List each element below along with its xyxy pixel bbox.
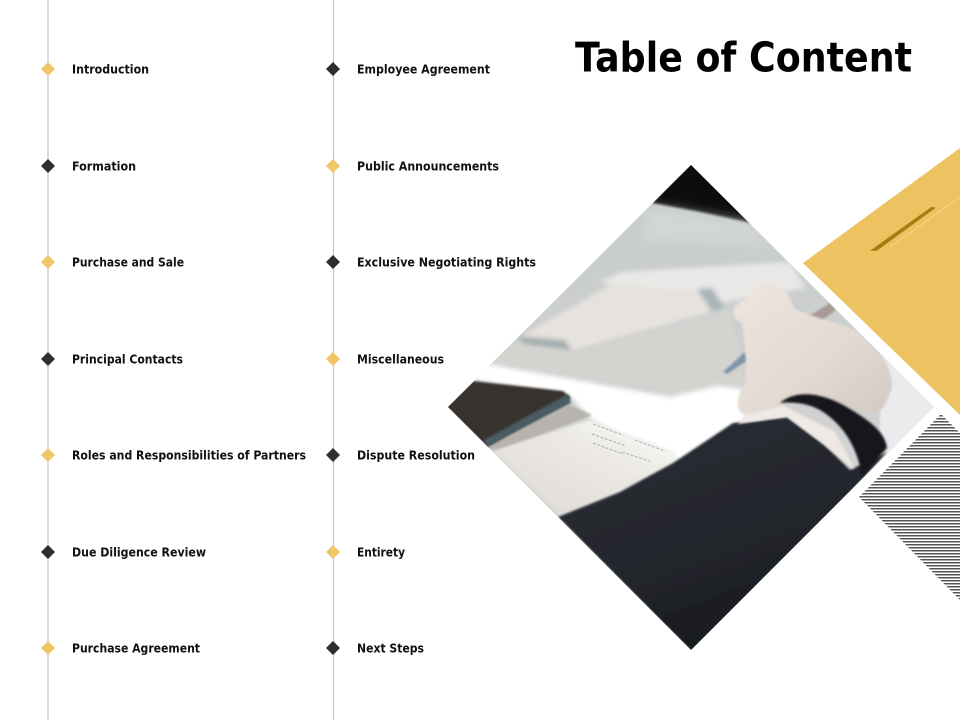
item: Introduction: Introduction [72, 62, 149, 76]
right bright background [880, 354, 934, 460]
diamond photo: hand writing at a desk [440, 160, 940, 660]
jacket sleeve [558, 417, 887, 660]
item: Entirety: Entirety [357, 546, 405, 560]
folded notebook [518, 262, 806, 351]
item: Purchase Agreement: Purchase Agreement [72, 642, 200, 656]
phone [445, 381, 571, 447]
bright white desk band [474, 363, 746, 458]
handwriting scribbles [592, 424, 665, 462]
pen upper barrel [810, 302, 836, 320]
grey desk area [520, 317, 714, 354]
shirt cuff [738, 405, 855, 470]
wristband [780, 394, 887, 476]
timeline line: left column [47, 0, 49, 720]
item: Next Steps [326, 641, 424, 656]
yellow triangle accent [803, 148, 960, 415]
right column list [326, 62, 536, 656]
title: Table of Content [575, 34, 912, 82]
item: Principal Contacts: Principal Contacts [72, 352, 183, 366]
item: Introduction [41, 62, 149, 76]
phone edge [484, 394, 571, 447]
item: Due Diligence Review: Due Diligence Review [72, 546, 206, 560]
pen lower tip [723, 352, 748, 374]
item: Purchase and Sale [41, 255, 184, 270]
item: Exclusive Negotiating Rights: Exclusive Negotiating Rights [357, 256, 536, 270]
item: Employee Agreement: Employee Agreement [357, 62, 490, 76]
item: Formation: Formation [72, 160, 136, 174]
phone shadow [487, 405, 592, 452]
item: Formation [41, 159, 136, 174]
item: Miscellaneous [326, 352, 444, 366]
timeline line: right column [332, 0, 334, 720]
item: Purchase and Sale: Purchase and Sale [72, 256, 184, 270]
item: Roles and Responsibilities of Partners: Roles and Responsibilities of Partners [72, 448, 306, 462]
item: Dispute Resolution: Dispute Resolution [357, 448, 475, 462]
dark top corner of photo [652, 165, 750, 224]
left column list [41, 62, 306, 656]
hand [733, 283, 892, 414]
item: Miscellaneous: Miscellaneous [357, 352, 444, 366]
item: Next Steps: Next Steps [357, 642, 424, 656]
notepaper [494, 420, 679, 515]
item: Principal Contacts [41, 352, 183, 366]
item: Public Announcements: Public Announcements [357, 160, 499, 174]
item: Entirety [326, 545, 405, 560]
striped diamond accent [855, 414, 960, 602]
upper pale band [649, 198, 752, 238]
